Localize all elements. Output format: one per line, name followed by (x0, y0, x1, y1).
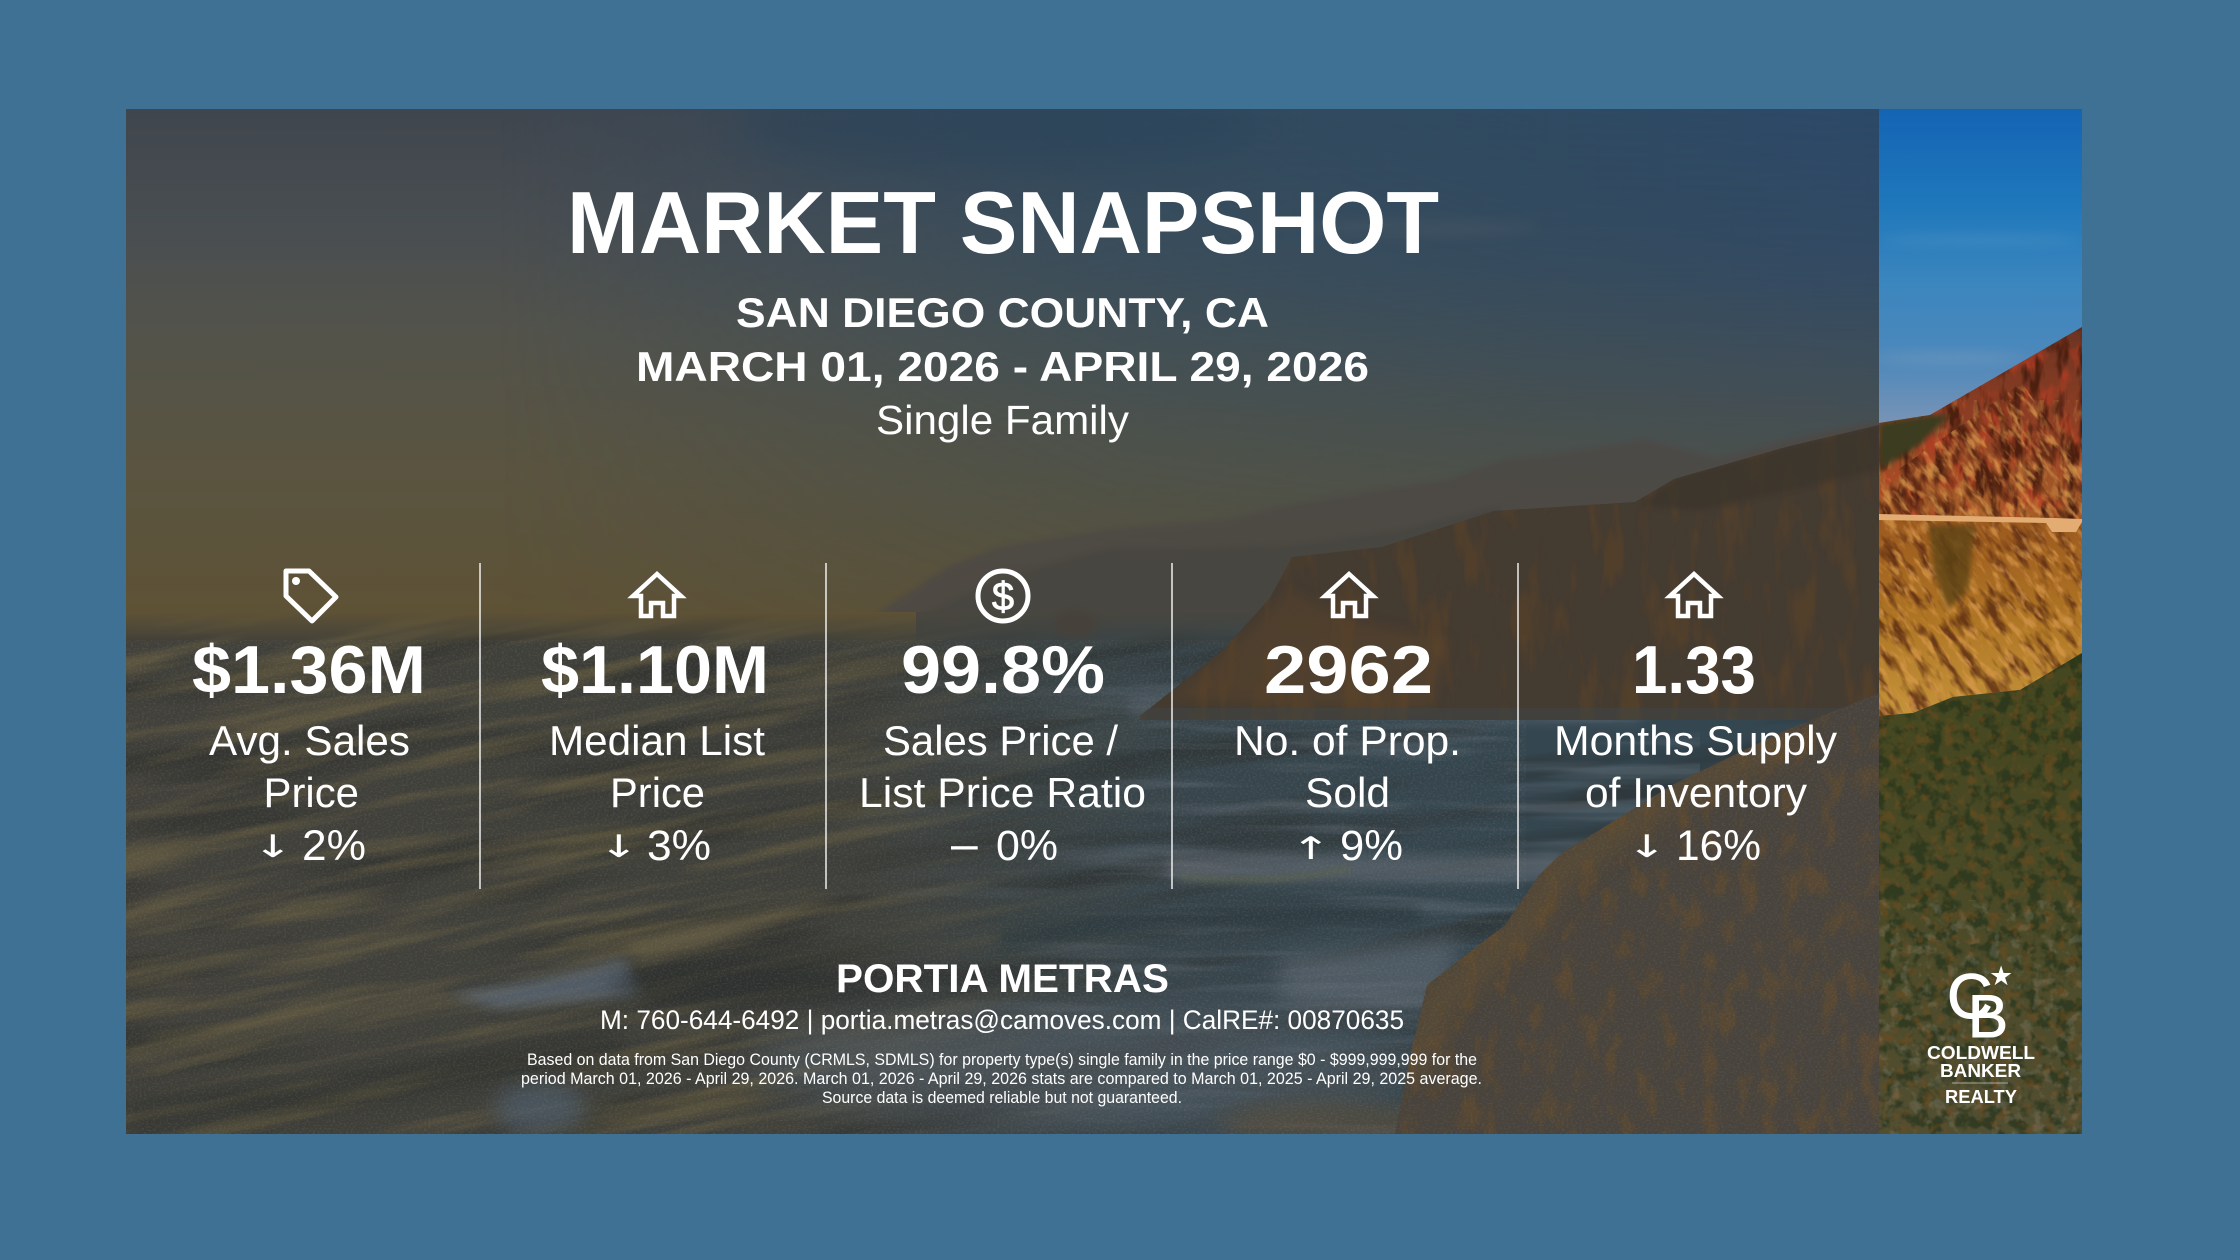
logo monogram: C (1947, 962, 1992, 1032)
change: ↓ (253, 829, 293, 865)
change: ↓ (1627, 829, 1667, 865)
value: 1.33 (1632, 632, 1756, 708)
agent contact: M: 760-644-6492 | portia.metras@camoves.com | CalRE#: 00870635 (600, 1005, 1404, 1035)
label: Sold (1305, 769, 1390, 816)
strip vegetation (1879, 650, 2082, 1134)
change: 9% (1340, 822, 1403, 870)
left wave crest (126, 890, 910, 1134)
title: MARKET SNAPSHOT (567, 173, 1439, 272)
logo wordmark: COLDWELL (1927, 1043, 2035, 1063)
change: ↑ (1291, 831, 1331, 867)
strip sky (1879, 109, 2082, 423)
label: List Price Ratio (859, 769, 1146, 816)
stat dividers (480, 563, 1518, 889)
label (1554, 717, 1837, 816)
label: Median List (549, 717, 765, 764)
panel: coastal photo with dark overlay (126, 80, 1880, 1149)
change (599, 822, 711, 870)
horizon haze right (916, 612, 1257, 636)
disclaimer: period March 01, 2026 - April 29, 2026. March 01, 2026 - April 29, 2026 stats are compared to March 01, 2025 - April 29, 2025 average. (521, 1069, 1482, 1088)
strip rock face (1879, 327, 2082, 716)
panel: side photo strip (1879, 109, 2082, 1134)
rock island (1079, 632, 1080, 633)
property type: Single Family (876, 397, 1130, 443)
logo monogram: ★ (1989, 961, 2013, 992)
logo: Coldwell Banker Realty (1927, 961, 2035, 1107)
stat: median list price (541, 574, 769, 870)
sea streaks (126, 638, 1759, 1134)
heading: location and date range: SAN DIEGO COUNTY, CA (736, 289, 1269, 336)
change: 16% (1676, 822, 1761, 870)
value: $1.10M (541, 632, 769, 708)
change: ↓ (599, 829, 639, 865)
label: of Inventory (1585, 769, 1807, 816)
icon: house (1325, 574, 1373, 616)
value: $1.36M (192, 632, 426, 708)
right surf bands (750, 700, 1640, 1149)
foreground cliff (1395, 690, 1880, 1134)
label (1234, 717, 1461, 816)
sea (126, 612, 1879, 1149)
logo monogram (1947, 961, 2013, 1050)
icon: dollar coin (978, 571, 1028, 621)
change (253, 822, 366, 870)
change: 0% (996, 822, 1058, 870)
icon: house (1670, 574, 1718, 616)
horizon haze left (126, 612, 916, 638)
change (1291, 822, 1403, 870)
logo monogram: B (1968, 983, 2008, 1050)
disclaimer (521, 1050, 1482, 1107)
stat: average sales price (192, 571, 426, 870)
label: Sales Price / (883, 717, 1118, 764)
label (549, 717, 765, 816)
label (209, 717, 410, 816)
label: Months Supply (1554, 717, 1837, 764)
strip rock lower streaks (1879, 384, 2082, 716)
label: Price (264, 769, 359, 816)
label: Price (610, 769, 705, 816)
sky backdrop (126, 109, 1879, 612)
heading: location and date range (636, 289, 1369, 390)
disclaimer: Based on data from San Diego County (CRMLS, SDMLS) for property type(s) single family in the price range $0 - $999,999,999 for the (527, 1050, 1477, 1069)
stat: number of properties sold (1234, 574, 1461, 870)
disclaimer: Source data is deemed reliable but not guaranteed. (822, 1088, 1182, 1107)
icon: house (633, 574, 681, 616)
middle headland (1140, 420, 1880, 720)
distant mountains (884, 422, 1877, 612)
icon: dollar coin: $ (992, 575, 1014, 619)
icon: price tag (286, 571, 336, 621)
value: 2962 (1264, 632, 1433, 708)
change (1627, 822, 1761, 870)
label: No. of Prop. (1234, 717, 1461, 764)
change (951, 818, 1058, 871)
logo wordmark: REALTY (1945, 1087, 2017, 1107)
grain (126, 640, 1526, 1134)
value: 99.8% (901, 632, 1105, 708)
label: Avg. Sales (209, 717, 410, 764)
label (859, 717, 1146, 816)
stat: sales price to list price ratio (859, 571, 1146, 871)
logo wordmark (1927, 1043, 2035, 1107)
agent name: PORTIA METRAS (836, 957, 1169, 1001)
logo wordmark: BANKER (1940, 1061, 2021, 1081)
change: – (951, 818, 978, 871)
change: 3% (647, 822, 711, 870)
change: 2% (302, 822, 366, 870)
stat: months supply of inventory (1554, 574, 1837, 870)
heading: location and date range: MARCH 01, 2026 - APRIL 29, 2026 (636, 343, 1369, 390)
strip road (1879, 514, 2082, 532)
